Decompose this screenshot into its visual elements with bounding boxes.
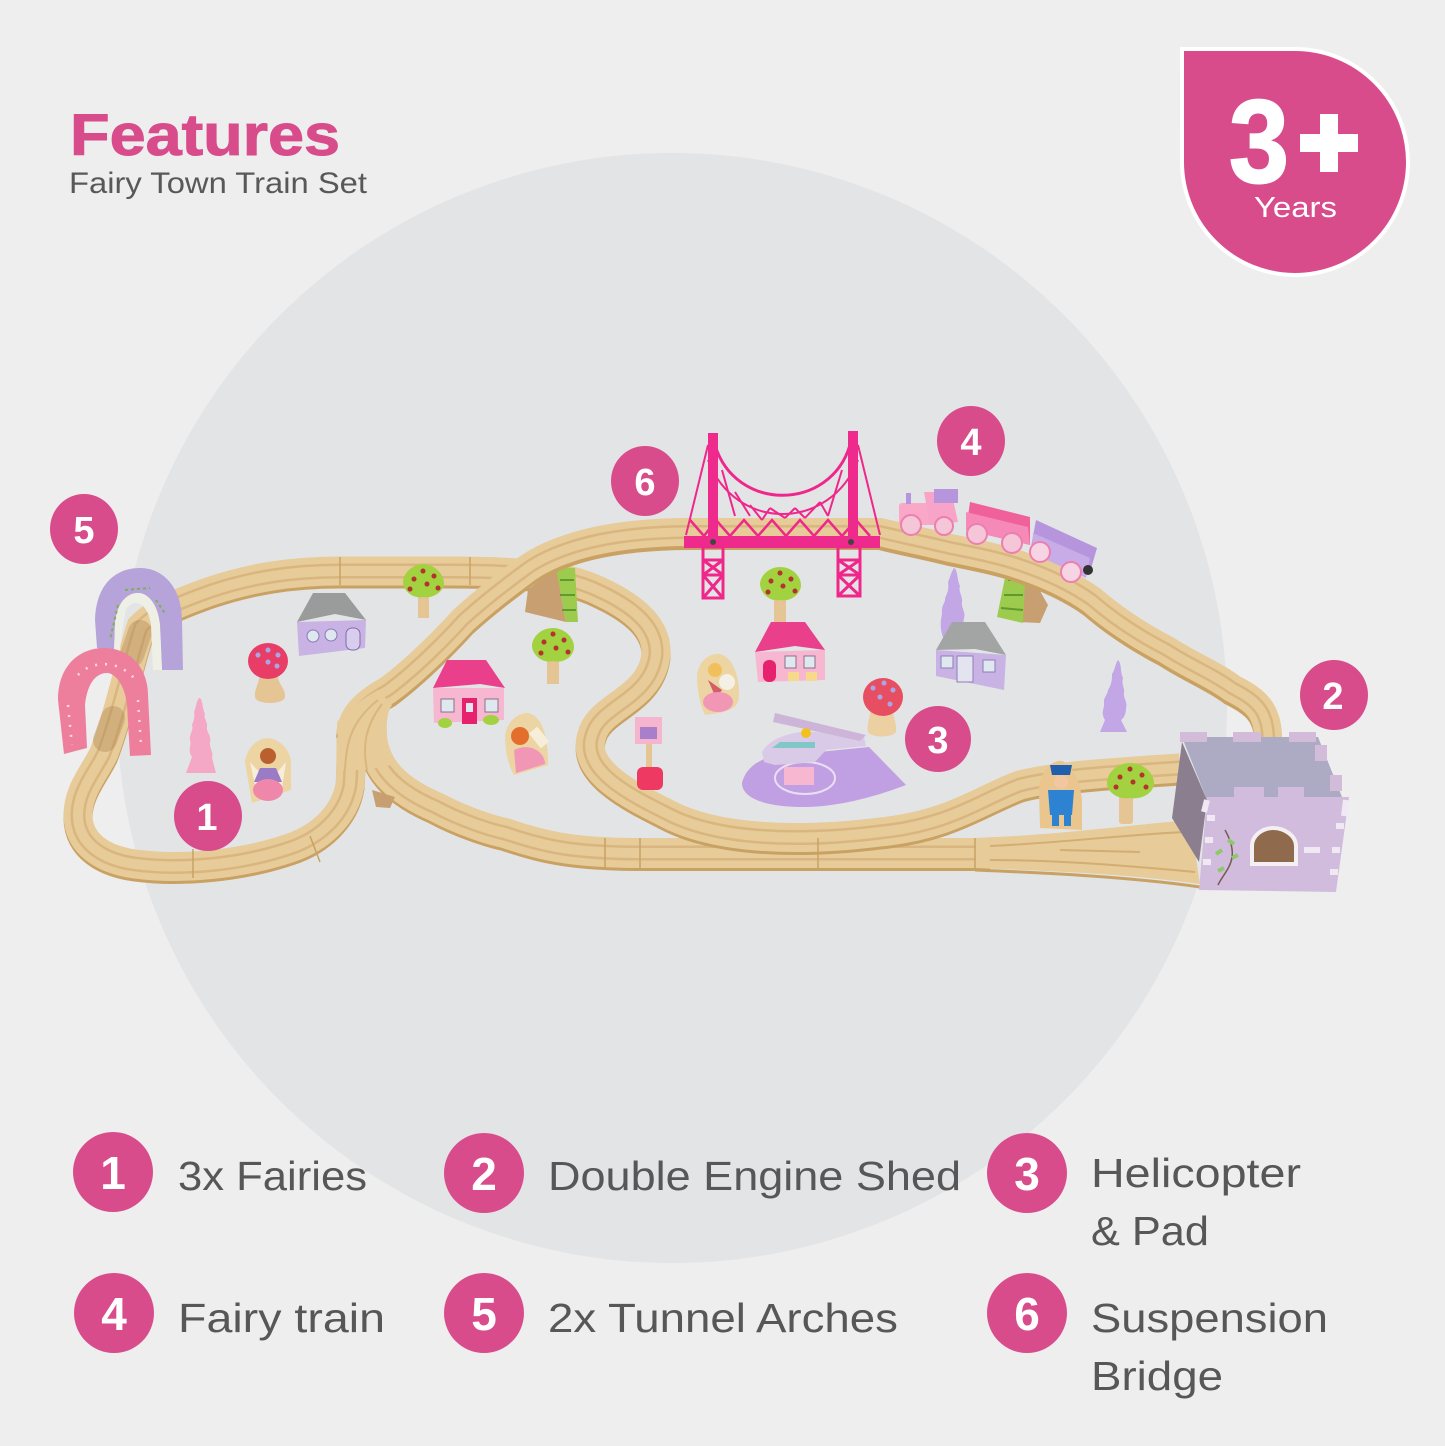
legend item 3: 3 bbox=[1014, 1148, 1040, 1200]
age badge: 3+ Years: Years bbox=[1254, 192, 1337, 224]
engine shed bbox=[1172, 732, 1349, 892]
suspension bridge bbox=[684, 431, 880, 598]
title: Features bbox=[69, 103, 368, 200]
station master figure bbox=[1039, 761, 1082, 830]
house: purple with grey roof right bbox=[936, 622, 1006, 690]
title: Features: Features bbox=[70, 103, 340, 168]
callout marker 1: 1 bbox=[196, 797, 218, 839]
callout marker 3 bbox=[905, 706, 971, 772]
tree: by shed bbox=[1107, 763, 1154, 824]
mushroom: left bbox=[248, 643, 288, 703]
fairy figure: right bbox=[697, 654, 739, 715]
legend item 5: 2x Tunnel Arches bbox=[548, 1295, 898, 1341]
train: pink carriage bbox=[966, 502, 1030, 553]
tree: under bridge bbox=[760, 567, 801, 622]
shed: front face bbox=[1199, 787, 1349, 892]
shed: roof bbox=[1182, 737, 1342, 800]
legend item 5 bbox=[444, 1273, 898, 1353]
legend item 3 bbox=[987, 1133, 1301, 1254]
wooden track: main long loop passing under bbox=[78, 557, 1180, 878]
callout marker 4 bbox=[937, 406, 1005, 476]
callout marker 5: 5 bbox=[73, 510, 95, 552]
wooden track: lower switch section bbox=[370, 722, 1200, 887]
tunnel arch: pink bbox=[58, 648, 151, 756]
legend item 4: Fairy train bbox=[178, 1295, 385, 1341]
train: purple carriage bbox=[1030, 520, 1097, 582]
signal post bbox=[635, 717, 663, 790]
cone tree: purple right bbox=[1100, 660, 1127, 732]
helicopter pad bbox=[742, 747, 906, 807]
fairy train bbox=[899, 489, 1097, 582]
cone tree: purple upper bbox=[941, 568, 964, 640]
legend item 1 bbox=[73, 1132, 367, 1212]
legend item 4: 4 bbox=[101, 1288, 127, 1340]
callout marker 1 bbox=[174, 781, 242, 851]
age badge: 3+ Years bbox=[1182, 49, 1408, 275]
helicopter bbox=[762, 713, 866, 785]
shed: arched door bbox=[1252, 828, 1296, 864]
track junction block bbox=[337, 690, 392, 770]
callout marker 4: 4 bbox=[960, 422, 982, 464]
age badge: 3+ Years: 3 bbox=[1229, 76, 1289, 208]
legend item 5: 5 bbox=[471, 1288, 497, 1340]
train: engine bbox=[899, 489, 958, 535]
cone tree: pink bbox=[186, 698, 216, 773]
legend item 1: 3x Fairies bbox=[178, 1153, 367, 1199]
legend item 6: Bridge bbox=[1091, 1353, 1223, 1399]
legend item 6: Suspension bbox=[1091, 1295, 1328, 1341]
legend item 6: 6 bbox=[1014, 1288, 1040, 1340]
legend item 1: 1 bbox=[100, 1147, 126, 1199]
legend item 6 bbox=[987, 1273, 1328, 1399]
mushroom: right bbox=[863, 678, 903, 736]
bridge support: right bbox=[997, 563, 1048, 623]
bridge support: left bbox=[525, 567, 578, 622]
tree: middle-left bbox=[532, 628, 574, 684]
fairy figure: left bbox=[245, 738, 291, 803]
house: pink right bbox=[755, 622, 825, 682]
callout marker 3: 3 bbox=[927, 720, 949, 762]
legend item 4 bbox=[74, 1273, 385, 1353]
shed: inside wall bbox=[1172, 742, 1207, 862]
legend item 3: Helicopter bbox=[1091, 1150, 1301, 1196]
wooden track: raised overpass to engine shed bbox=[350, 532, 1268, 749]
legend item 2 bbox=[444, 1133, 961, 1213]
title: Features: Fairy Town Train Set bbox=[69, 167, 368, 200]
tunnel arch: purple bbox=[95, 568, 183, 670]
track shading inside tunnels bbox=[105, 632, 140, 740]
callout marker 2: 2 bbox=[1322, 676, 1344, 718]
house: pink left bbox=[433, 660, 505, 728]
tree: top bbox=[403, 564, 444, 618]
callout marker 6 bbox=[611, 446, 679, 516]
background circle bbox=[117, 153, 1227, 1263]
shed: vine bbox=[1218, 830, 1232, 885]
legend item 2: 2 bbox=[471, 1148, 497, 1200]
house: purple with grey roof bbox=[297, 593, 366, 656]
fairy figure: middle bbox=[505, 713, 548, 775]
legend item 3: & Pad bbox=[1091, 1208, 1209, 1254]
callout marker 6: 6 bbox=[634, 462, 656, 504]
legend item 2: Double Engine Shed bbox=[548, 1153, 961, 1199]
callout marker 2 bbox=[1300, 660, 1368, 730]
callout marker 5 bbox=[50, 494, 118, 564]
